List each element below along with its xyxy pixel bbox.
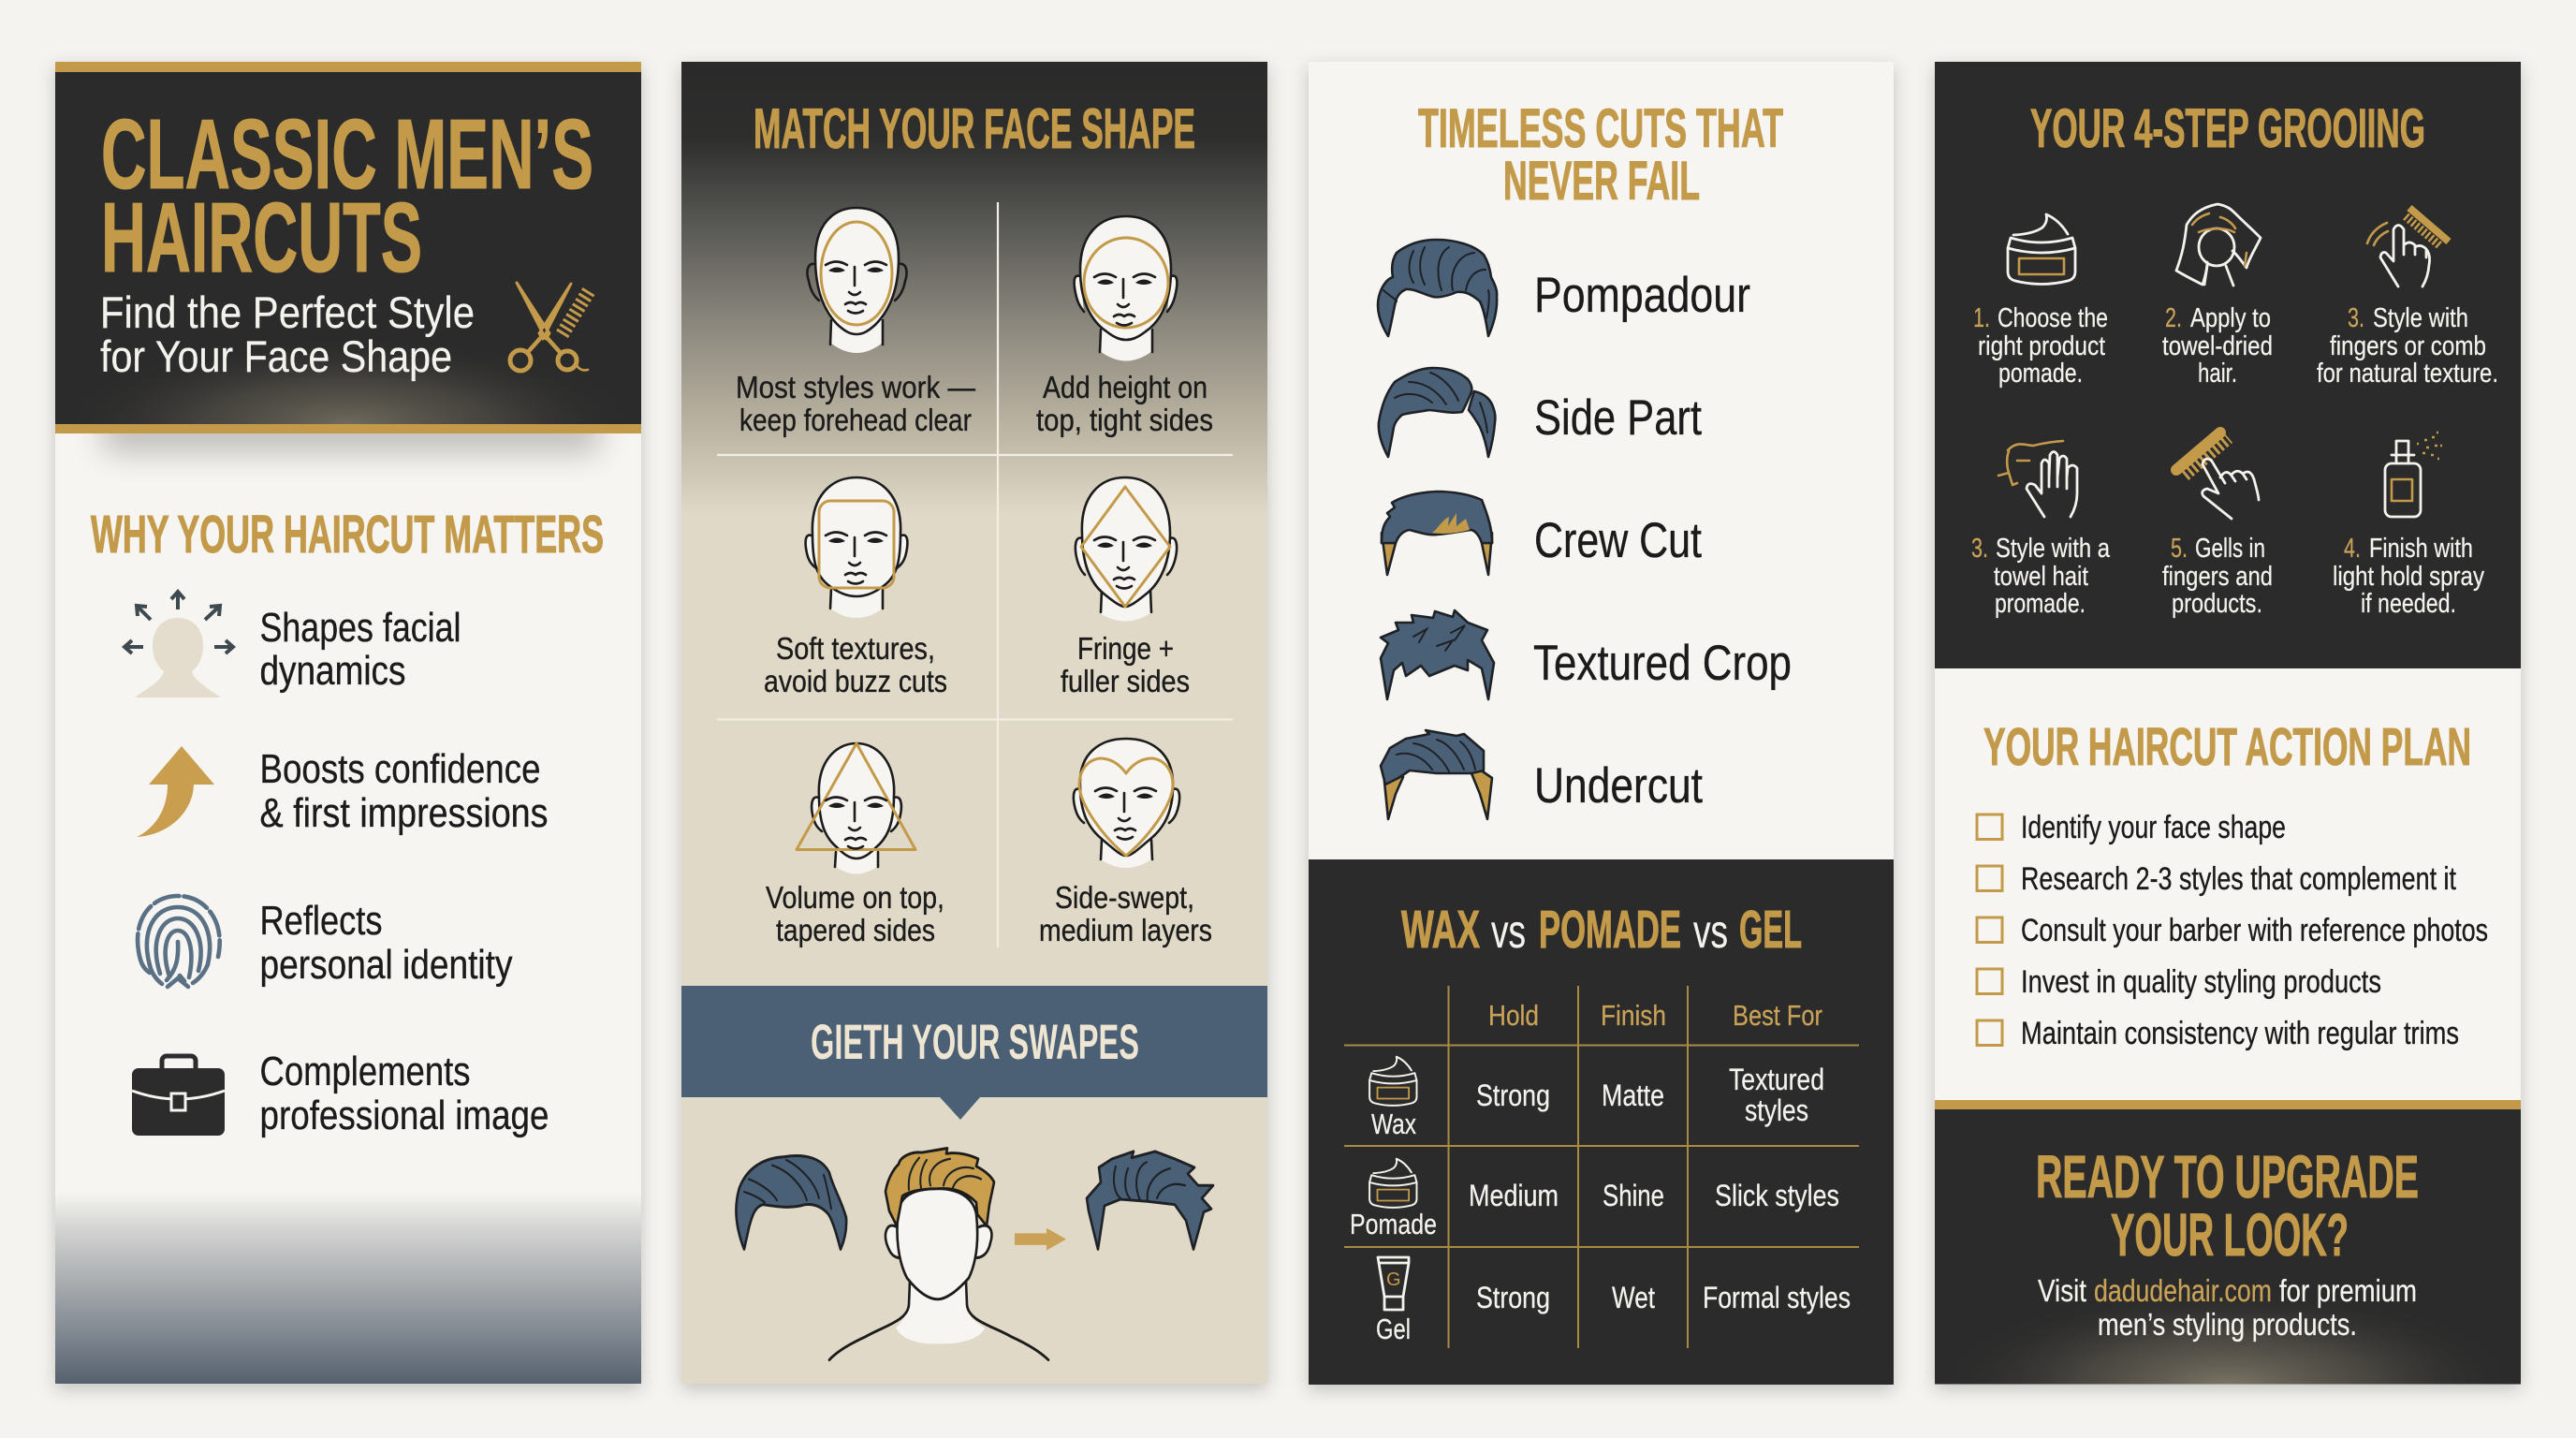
row: pomade: Pomade [1350, 1208, 1437, 1240]
heading: wax vs pomade vs gel [1401, 900, 1802, 960]
face: triangle [797, 743, 915, 874]
callout: ready to upgrade [1935, 1100, 2521, 1384]
step 1: 1. [1973, 303, 1990, 333]
checklist: Identify your face shape [2021, 810, 2286, 845]
label: side part: Side Part [1534, 390, 1702, 446]
item: reflects identity: Reflects [260, 898, 382, 944]
icon: comb and pointing hand [2176, 433, 2259, 519]
grid dividers [717, 202, 1233, 947]
icon: head with arrows [124, 592, 233, 697]
icon: fingerprint [138, 896, 220, 987]
row: pomade: Shine [1603, 1179, 1664, 1212]
checklist: Research 2-3 styles that complement it [2021, 861, 2456, 897]
banner: gieth your swapes: GIETH YOUR SWAPES [811, 1015, 1139, 1070]
item: boosts confidence: Boosts confidence [260, 746, 541, 792]
icon: spray bottle [2385, 433, 2442, 517]
icon: jar [2008, 214, 2075, 285]
row: pomade: Medium [1469, 1179, 1559, 1212]
step 6: 4. [2344, 534, 2361, 564]
row: wax: Textured [1729, 1063, 1824, 1096]
icon: towel on hair [2176, 204, 2261, 286]
cut: side part [1379, 368, 1495, 457]
caption: heart [1039, 880, 1212, 947]
hair: right swatch [1087, 1152, 1213, 1249]
item: boosts confidence [137, 746, 549, 837]
step 4: promade. [1995, 589, 2086, 619]
callout: ready to upgrade: for premium [2279, 1273, 2417, 1308]
caption: triangle: tapered sides [776, 913, 935, 947]
heading: wax vs pomade vs gel: vs [1693, 905, 1728, 958]
title: HAIRCUTS [101, 183, 422, 293]
step 4: Style with a [1996, 534, 2111, 564]
checklist: Maintain consistency with regular trims [2021, 1016, 2459, 1051]
step 1: right product [1978, 331, 2105, 361]
item: shapes facial dynamics [124, 592, 461, 697]
subtitle [100, 287, 475, 381]
icon: gel tube [1378, 1257, 1409, 1310]
item: complements professional image: professional image [260, 1093, 549, 1138]
step 1: pomade. [1998, 359, 2083, 389]
table header: Hold [1488, 999, 1539, 1032]
icon: gel tube: G [1386, 1269, 1401, 1290]
step 3 [2317, 208, 2498, 389]
step 4: towel hait [1994, 562, 2088, 592]
caption: triangle: Volume on top, [766, 880, 944, 915]
label: undercut: Undercut [1534, 758, 1703, 814]
row: pomade [1350, 1159, 1839, 1240]
callout: ready to upgrade: Visit [2038, 1273, 2086, 1308]
item: shapes facial dynamics: dynamics [260, 648, 406, 694]
caption: oval [736, 370, 975, 437]
panel: intro column [55, 62, 641, 1384]
face: diamond [1076, 477, 1177, 622]
cut: pompadour [1378, 240, 1497, 336]
step 5: fingers and [2162, 562, 2273, 592]
row: gel: Strong [1476, 1281, 1550, 1314]
caption: oval: Most styles work — [736, 370, 975, 404]
step 6: Finish with [2369, 534, 2473, 564]
face: heart [1074, 739, 1179, 868]
heading: timeless cuts: TIMELESS CUTS THAT [1418, 98, 1783, 159]
step 6: light hold spray [2333, 562, 2484, 592]
step 3: Style with [2373, 303, 2468, 333]
table rules [1344, 986, 1859, 1348]
caption: triangle [766, 880, 944, 947]
icon: hair and open hand [1998, 441, 2077, 517]
item: reflects identity: personal identity [260, 942, 513, 988]
row: pomade: Slick styles [1715, 1179, 1839, 1212]
heading: wax vs pomade vs gel: vs [1491, 905, 1526, 958]
step 1 [1973, 214, 2108, 389]
item: complements professional image [132, 1049, 549, 1138]
subtitle: Find the Perfect Style [100, 287, 475, 337]
face: square [806, 477, 907, 618]
caption: round [1036, 370, 1213, 437]
table header [1488, 999, 1822, 1032]
panel: grooming, action plan and cta [1935, 62, 2521, 1384]
label: crew cut: Crew Cut [1534, 513, 1702, 568]
icon: gold arrow [137, 746, 214, 837]
caption: square: avoid buzz cuts [764, 664, 947, 698]
row: gel [1376, 1257, 1851, 1345]
row: wax: styles [1745, 1093, 1808, 1127]
heading: timeless cuts [1418, 98, 1783, 212]
row: wax [1369, 1057, 1824, 1140]
heading: wax vs pomade vs gel: POMADE [1539, 900, 1681, 960]
step 2: Apply to [2190, 303, 2271, 333]
item: reflects identity [138, 896, 512, 988]
step 2 [2162, 204, 2273, 389]
row: wax: Wax [1371, 1108, 1416, 1140]
icon: scissors and comb [510, 283, 589, 371]
caption: diamond [1061, 631, 1190, 698]
item: boosts confidence: & first impressions [260, 790, 549, 836]
icon: wax jar [1369, 1057, 1417, 1106]
step 3: fingers or comb [2330, 331, 2486, 361]
callout: ready to upgrade: dadudehair.com [2094, 1273, 2272, 1308]
step 2: towel-dried [2162, 331, 2273, 361]
caption: diamond: fuller sides [1061, 664, 1190, 698]
heading: timeless cuts: NEVER FAIL [1503, 151, 1700, 212]
icon: briefcase [132, 1056, 225, 1136]
heading: match your face shape: MATCH YOUR FACE SHAPE [754, 97, 1195, 160]
caption: heart: Side-swept, [1055, 880, 1194, 915]
step 5 [2162, 433, 2273, 619]
caption: diamond: Fringe + [1077, 631, 1174, 666]
heading: wax vs pomade vs gel: GEL [1739, 900, 1802, 960]
callout: ready to upgrade: men’s styling products. [2098, 1307, 2357, 1342]
hair: left swatch [736, 1156, 846, 1249]
icon: pomade jar [1369, 1159, 1417, 1208]
row: gel: Formal styles [1703, 1281, 1851, 1314]
step 6 [2333, 433, 2484, 619]
row: gel: Gel [1376, 1313, 1411, 1345]
banner: gieth your swapes [681, 986, 1267, 1120]
step 4: 3. [1971, 534, 1988, 564]
callout: ready to upgrade: YOUR LOOK? [2111, 1201, 2349, 1269]
label: textured crop: Textured Crop [1533, 636, 1792, 691]
caption: heart: medium layers [1039, 913, 1212, 947]
section: grooming steps [1935, 62, 2521, 668]
item: complements professional image: Complements [260, 1049, 470, 1094]
caption: square: Soft textures, [776, 631, 935, 666]
table header: Finish [1601, 999, 1666, 1032]
step 4 [1971, 441, 2111, 619]
heading: why your haircut matters: WHY YOUR HAIRCUT MATTERS [91, 505, 604, 565]
face: round [1075, 216, 1177, 361]
table header: Best For [1733, 999, 1822, 1032]
heading: wax vs pomade vs gel: WAX [1401, 900, 1480, 960]
icon: comb and hand [2367, 208, 2449, 286]
step 5: products. [2172, 589, 2262, 619]
bottom gradient [55, 1192, 641, 1384]
title block [55, 62, 641, 433]
header shadow [103, 412, 599, 451]
step 1: Choose the [1998, 303, 2108, 333]
step 5: Gells in [2195, 534, 2265, 564]
row: wax: Matte [1602, 1078, 1664, 1112]
title: CLASSIC MEN’S [101, 99, 593, 210]
section: wax vs pomade vs gel table [1309, 859, 1894, 1385]
checklist: Invest in quality styling products [2021, 964, 2381, 1000]
caption: round: top, tight sides [1036, 403, 1213, 437]
step 3: for natural texture. [2317, 359, 2498, 389]
face: oval [807, 208, 907, 353]
cut: undercut [1381, 730, 1492, 819]
item: shapes facial dynamics: Shapes facial [260, 605, 461, 651]
panel: timeless cuts and product table [1309, 62, 1894, 1385]
arrow: gold right [1015, 1228, 1066, 1251]
caption: round: Add height on [1043, 370, 1208, 404]
caption: square [764, 631, 947, 698]
figure: man with gold hair [829, 1149, 1048, 1360]
step 3: 3. [2348, 303, 2364, 333]
step 2: 2. [2165, 303, 2182, 333]
step 6: if needed. [2361, 589, 2456, 619]
caption: oval: keep forehead clear [739, 403, 972, 437]
row: gel: Wet [1612, 1281, 1655, 1314]
checklist [1977, 810, 2488, 1051]
step 5: 5. [2171, 534, 2188, 564]
cut: crew cut [1382, 492, 1492, 575]
label: pompadour: Pompadour [1534, 268, 1750, 323]
row: wax: Strong [1476, 1078, 1550, 1112]
panel: match your face shape [681, 62, 1267, 1384]
title [101, 99, 593, 293]
cut: textured crop [1381, 610, 1494, 699]
subtitle: for Your Face Shape [100, 331, 452, 381]
step 2: hair. [2198, 359, 2237, 389]
